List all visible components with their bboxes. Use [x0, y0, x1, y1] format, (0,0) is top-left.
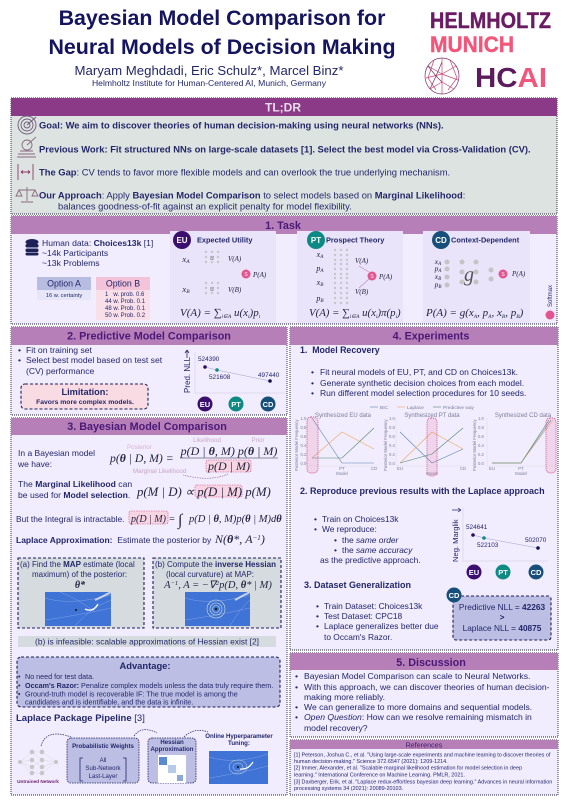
panel: step b: (local curvature) at MAP: — [166, 570, 254, 579]
callout: advantage: • — [18, 672, 21, 681]
bullets: recovery — [311, 367, 526, 398]
bullets: reproduce: Train on Choices13k — [322, 514, 399, 524]
heading: bayesian: 3. Bayesian Model Comparison — [67, 421, 227, 433]
box: probabilistic weights: Last-Layer — [89, 773, 117, 780]
panel: references — [290, 740, 558, 795]
authors: Maryam Meghdadi, Eric Schulz*, Marcel Binz* — [75, 63, 343, 78]
chart: negative marginal likelihood: 522103 — [477, 542, 499, 549]
chart: negative marginal likelihood: 502070 — [525, 537, 547, 544]
callout: limitation — [21, 384, 148, 409]
Bayes formula: p(θ | D, M) = — [109, 452, 174, 465]
chart: negative marginal likelihood — [451, 507, 548, 562]
heading: experiments: 4. Experiments — [393, 330, 469, 342]
logo: Helmholtz Munich: HELMHOLTZ — [430, 8, 551, 33]
callout: NLL comparison: > — [500, 612, 505, 622]
model card: expected utility: i — [259, 314, 261, 320]
chart: predictive NLL — [183, 350, 285, 393]
subheading: model recovery: 1. Model Recovery — [300, 345, 380, 355]
model card: context-dependent: , x — [491, 307, 502, 319]
bullets: recovery: • — [311, 388, 314, 398]
model card: context-dependent: CD — [435, 236, 447, 245]
reference list: [3] Daxberger, Erik, et al. "Laplace redux-effortless bayesian deep learning." Advances in neural information — [294, 780, 552, 786]
chart: synthesized PT data: 0.8 — [389, 425, 395, 430]
bullets: generalization: • — [316, 621, 319, 631]
Laplace approximation: N(θ*, A — [215, 532, 253, 546]
icon: gap arrows — [18, 164, 33, 180]
arrow: to probabilistic weights — [41, 734, 71, 746]
subheading: reproduce: 2. Reproduce previous results with the Laplace approach — [300, 486, 545, 496]
box: probabilistic weights: All — [100, 757, 106, 764]
icon: database — [26, 239, 38, 256]
bullets: discussion: Open Question: How can we resolve remaining mismatch in — [304, 712, 532, 722]
reference list: learning." International Conference on Machine Learning. PMLR, 2021. — [294, 772, 465, 778]
marginal likelihood formula: p(M | D) ∝ p(D | M) p(M) — [136, 485, 271, 499]
chart: synthesized EU data: PT — [339, 466, 345, 471]
panel: 2. Predictive Model Comparison — [11, 327, 287, 415]
model badges: EU — [469, 568, 479, 577]
chart legend — [370, 405, 475, 411]
marginal likelihood formula: be used for Model selection. — [18, 490, 130, 500]
chart: negative marginal likelihood: 524641 — [466, 524, 488, 531]
chart: synthesized EU data: 0.6 — [300, 434, 307, 439]
bullets: reproduce: as the predictive approach. — [320, 555, 421, 565]
model card: context-dependent: p — [435, 280, 438, 289]
chart: synthesized EU data: 0.4 — [300, 443, 307, 448]
Laplace approximation — [16, 532, 265, 546]
dataset text — [42, 238, 153, 268]
bullets: discussion: Bayesian Model Comparison can scale to Neural Networks. — [304, 671, 530, 681]
model badges — [198, 396, 276, 412]
diagram: untrained network: Untrained Network — [17, 779, 59, 784]
model card: expected utility: u — [210, 253, 214, 262]
integral formula: p(D | M) = — [130, 514, 175, 525]
text: online tuning — [205, 733, 273, 747]
Laplace approximation: −1 — [253, 534, 261, 542]
callout: advantage: candidates and is identifiable, and the data is infinite. — [25, 698, 193, 706]
bullets: • — [18, 345, 21, 355]
panel: step b: p(D, — [218, 580, 241, 591]
chart: predictive NLL: 521608 — [209, 374, 231, 381]
model card: expected utility: i∈A — [222, 314, 232, 320]
Bayes formula: p(D | M) — [207, 459, 250, 473]
plot: loss landscape a — [45, 592, 111, 626]
model card: context-dependent: A — [487, 314, 492, 320]
chart: synthesized CD data: 0.0 — [478, 461, 484, 466]
plot: tuning landscape — [209, 751, 268, 784]
Bayes formula: Likelihood — [193, 437, 221, 444]
bullets: reproduce — [314, 514, 421, 565]
model card: expected utility: A — [185, 259, 190, 265]
callout: advantage: • — [18, 690, 21, 698]
bullets: • — [18, 355, 21, 365]
reference list: [1] Peterson, Joshua C., et al. "Using large-scale experiments and machine learning to discover theories of — [294, 752, 551, 758]
option B table: 1 w. prob. 0.6 — [105, 292, 145, 298]
chart: synthesized EU data: Model — [336, 471, 348, 476]
panel: 3. Bayesian Model Comparison — [11, 418, 287, 795]
heading: TL;DR: TL;DR — [265, 100, 301, 114]
softmax legend — [546, 285, 554, 320]
diagram: untrained network — [17, 750, 59, 784]
chart: synthesized PT data — [383, 413, 466, 476]
model card: prospect theory: A — [319, 254, 324, 260]
chart: synthesized EU data: 0.2 — [300, 452, 307, 457]
note: hessian infeasible: (b) is infeasible: scalable approximations of Hessian exist [2] — [35, 636, 259, 646]
model card: context-dependent: B — [438, 277, 441, 282]
model card: context-dependent: P(A) = g(x — [426, 307, 474, 319]
heading: Laplace pipeline: Laplace Package Pipeline [3] — [16, 713, 145, 724]
chart: synthesized CD data: Synthesized CD data — [495, 413, 552, 419]
logo: brain — [425, 58, 459, 94]
bullets: Select best model based on test set — [26, 355, 163, 365]
model badges: PT — [231, 400, 241, 409]
panel: step b: θ* | M) — [241, 580, 272, 591]
Bayes formula: Prior — [251, 437, 265, 444]
chart legend: BIC — [380, 405, 389, 411]
bullets: reproduce: • — [314, 524, 317, 534]
bullets: recovery: Generate synthetic decision choices from each model. — [320, 378, 524, 388]
bullets: Fit on training set — [26, 345, 93, 355]
bullets: recovery: Run different model selection procedures for 10 seeds. — [320, 388, 526, 398]
model card: expected utility: EU — [176, 236, 188, 245]
chart: synthesized CD data: EU — [489, 466, 495, 471]
bullets: reproduce: • — [314, 514, 317, 524]
callout: advantage: Ground-truth model is recoverable IF: The true model is among the — [25, 690, 238, 698]
integral formula: ∫ — [177, 512, 184, 530]
chart: synthesized EU data: 0.8 — [300, 425, 307, 430]
bullets: generalization: to Occam's Razor. — [324, 632, 392, 642]
model card: context-dependent — [423, 231, 530, 323]
model card: context-dependent: ) — [519, 307, 524, 319]
chart: synthesized EU data: 1.0 — [300, 416, 307, 421]
panel: step a: (a) Find the MAP estimate (local — [20, 560, 135, 569]
bullets: recovery: • — [311, 378, 314, 388]
model card: expected utility: x — [182, 254, 186, 264]
panel: step a: maximum) of the posterior: — [32, 570, 127, 579]
chart: synthesized EU data: Synthesized EU data — [315, 413, 372, 419]
panel: 5. Discussion — [290, 653, 558, 737]
callout: advantage: Occam's Razor: Penalize complex models unless the data truly require them. — [25, 681, 273, 690]
model card: prospect theory: B — [320, 298, 324, 304]
Bayes formula — [17, 437, 278, 478]
chart: synthesized PT data: Posterior Model Frequency — [383, 419, 388, 471]
Laplace approximation: ) — [260, 532, 265, 546]
marginal likelihood formula: The Marginal Likelihood can — [18, 479, 132, 489]
model card: prospect theory: i — [376, 314, 378, 320]
box: probabilistic weights: Probabilistic Weights — [72, 743, 135, 750]
option B table — [96, 277, 150, 320]
model card: context-dependent: B — [438, 285, 441, 290]
bullets: discussion: • — [295, 702, 298, 712]
panel: step b: −1 — [171, 580, 178, 587]
option B table: Option B — [106, 278, 140, 288]
panel: TL;DR — [11, 98, 557, 214]
panel: step b: (b) Compute the inverse Hessian — [155, 560, 276, 569]
bullets: discussion: We can generalize to more domains and sequential models. — [304, 702, 532, 712]
model card: expected utility: Expected Utility — [197, 236, 253, 244]
model card: prospect theory: A — [319, 268, 324, 274]
bullets — [18, 345, 163, 376]
bullets: generalization: • — [316, 601, 319, 611]
reference list: [2] Immer, Alexander, et al. "Scalable marginal likelihood estimation for model selection in deep — [294, 766, 522, 772]
model card: context-dependent: Context-Dependent — [451, 236, 520, 244]
box: hessian approximation: Approximation — [150, 746, 194, 753]
chart: synthesized PT data: 0.4 — [389, 443, 395, 448]
bullets: recovery: Fit neural models of EU, PT, and CD on Choices13k. — [320, 367, 518, 377]
logo: Helmholtz Munich: MUNICH — [430, 32, 514, 57]
icon: scales — [16, 187, 38, 202]
callout: NLL comparison: Predictive NLL = 42263 — [459, 602, 545, 612]
model card: context-dependent: g — [464, 264, 474, 286]
callout: NLL comparison: Laplace NLL = 40875 — [463, 623, 542, 633]
reference list: processing systems 34 (2021): 20089-20103. — [294, 786, 404, 792]
model card: expected utility — [170, 231, 276, 323]
chart: synthesized EU data: Posterior Model Frequency — [294, 419, 299, 471]
model card: prospect theory: V(A) = ∑ — [309, 307, 350, 319]
model card: context-dependent: P(A) — [511, 270, 526, 278]
bullets: discussion: making more reliably. — [304, 692, 385, 702]
chart: synthesized CD data: 0.6 — [478, 434, 484, 439]
chart: synthesized CD data: 0.2 — [478, 452, 484, 457]
gap text: The Gap: CV tends to favor more flexible models and can overlook the true underlying mechanism. — [39, 166, 450, 178]
reference list: human decision-making." Science 372.6547 (2021): 1209-1214. — [294, 759, 448, 765]
model card: prospect theory: PT — [311, 236, 321, 245]
chart: synthesized EU data — [294, 413, 378, 476]
model card: context-dependent: S — [501, 272, 505, 278]
goal text: Goal: We aim to discover theories of human decision-making using neural networks (NNs). — [39, 120, 444, 130]
bullets: recovery: • — [311, 367, 314, 377]
integral formula: But the Integral is intractable. — [16, 514, 124, 524]
callout: NLL comparison — [446, 588, 551, 640]
approach text: Our Approach: Apply Bayesian Model Comparison to select models based on Marginal Likelihood: — [39, 190, 465, 200]
chart: synthesized PT data: 0.6 — [389, 434, 395, 439]
model card: expected utility: S — [244, 272, 248, 278]
model card: expected utility: )p — [249, 307, 259, 319]
Bayes formula: we have: — [17, 459, 52, 469]
bullets: generalization: Train Dataset: Choices13k — [324, 601, 423, 611]
chart: synthesized PT data: 1.0 — [389, 416, 395, 421]
model card: prospect theory — [297, 231, 403, 323]
option B table: 50 w. Prob. 0.2 — [105, 313, 146, 319]
option A table: 16 w. certainty — [46, 293, 82, 299]
integral formula: p(D | θ, M)p(θ | M)dθ — [188, 514, 282, 525]
chart: synthesized PT data: 0.2 — [389, 452, 395, 457]
bullets: reproduce: the same order — [342, 535, 400, 545]
bullets: discussion: • — [295, 712, 298, 722]
chart legend: Predictive way — [443, 405, 475, 411]
model card: context-dependent: A — [473, 314, 478, 320]
chart: synthesized PT data: EU — [397, 466, 403, 471]
Laplace approximation: Laplace Approximation: Estimate the posterior by — [16, 535, 212, 545]
panel: TL;DR: balances goodness-of-fit against an explicit penalty for model flexibility. — [58, 200, 352, 212]
model card: prospect theory: p — [316, 264, 320, 273]
previous work text: Previous Work: Fit structured NNs on large-scale datasets [1]. Select the best model via Cross-Validation (CV). — [39, 144, 531, 154]
model card: context-dependent: , p — [477, 307, 489, 319]
model card: prospect theory: P(A) — [378, 273, 393, 281]
text: online tuning: Tuning: — [228, 740, 250, 747]
model card: expected utility: x — [182, 284, 186, 294]
model card: expected utility: V(A) — [228, 255, 242, 263]
model card: context-dependent: A — [437, 269, 442, 274]
box: probabilistic weights: Sub-Network — [85, 765, 122, 772]
model card: expected utility: u — [210, 284, 214, 293]
arrow: to hessian — [134, 730, 157, 736]
model card: context-dependent: B — [516, 314, 520, 320]
bullets: generalization — [316, 601, 439, 642]
bullets: discussion: With this approach, we can discover theories of human decision- — [304, 682, 550, 692]
chart: synthesized CD data: Model — [515, 471, 527, 476]
chart: synthesized EU data: 0.0 — [300, 461, 307, 466]
callout: advantage — [17, 657, 280, 707]
Bayes formula: p(D | θ, M) p(θ | M) — [180, 444, 277, 458]
integral formula — [16, 511, 282, 530]
logo: HCAI: HCAI — [475, 62, 547, 93]
bullets: reproduce: the same accuracy — [342, 545, 413, 555]
chart: synthesized EU data: CD — [371, 466, 377, 471]
model card: prospect theory: V(A) — [355, 257, 369, 265]
bullets: generalization: Test Dataset: CPC18 — [324, 611, 403, 621]
callout: advantage: Advantage: — [119, 660, 171, 671]
model card: expected utility: P(A) — [252, 271, 267, 279]
model card: expected utility: V(B) — [228, 286, 242, 294]
panel: step a: θ* — [75, 580, 86, 591]
chart: synthesized CD data: Posterior Model Frequency — [472, 419, 477, 471]
model card: prospect theory: Prospect Theory — [326, 236, 385, 244]
plot: loss landscape b — [185, 592, 250, 626]
bullets: reproduce: • — [334, 535, 337, 545]
title: Neural Models of Decision Making — [48, 35, 396, 59]
panel: 1. Task — [11, 216, 557, 324]
dataset text: Human data: Choices13k [1] — [42, 238, 153, 248]
chart: synthesized PT data: 0.0 — [389, 461, 395, 466]
model card: context-dependent: A — [437, 262, 442, 267]
chart: synthesized CD data: 0.4 — [478, 443, 484, 448]
model badges — [466, 564, 544, 580]
model card: prospect theory: B — [320, 282, 324, 288]
heading: predictive: 2. Predictive Model Comparison — [67, 330, 231, 342]
chart: predictive NLL: Pred. NLL — [183, 356, 192, 393]
heading: task: 1. Task — [265, 220, 302, 232]
bullets: discussion — [295, 671, 550, 733]
chart: synthesized PT data: Synthesized PT data — [404, 413, 460, 419]
box: hessian approximation: Hessian — [160, 739, 184, 746]
bullets: reproduce: • — [334, 545, 337, 555]
model card: expected utility: B — [186, 289, 190, 295]
panel: step b — [153, 558, 281, 628]
marginal likelihood formula — [18, 479, 271, 500]
chart: synthesized PT data: Model — [426, 471, 438, 476]
model card: context-dependent: x — [435, 257, 438, 266]
title — [48, 6, 396, 59]
model card: prospect theory: )π(p — [376, 307, 396, 319]
panel: step a — [18, 558, 144, 628]
model card: expected utility: u(x — [231, 307, 248, 319]
text: online tuning: Online Hyperparameter — [205, 733, 273, 740]
bullets: reproduce: We reproduce: — [322, 524, 377, 534]
model badges: EU — [200, 400, 210, 409]
model card: context-dependent: B — [502, 314, 506, 320]
chart: synthesized PT data: CD — [460, 466, 466, 471]
bullets: (CV) performance — [26, 366, 95, 376]
model card: expected utility: V(A) = ∑ — [180, 307, 222, 319]
model card: prospect theory: V(B) — [355, 288, 369, 296]
model card: prospect theory: S — [370, 274, 374, 280]
heading: references: References — [406, 740, 443, 750]
Bayes formula: Posterior — [127, 444, 152, 451]
model card: prospect theory: x — [317, 278, 320, 287]
bullets: discussion: • — [295, 671, 298, 681]
model card: context-dependent: , p — [505, 307, 517, 319]
chart: synthesized CD data: PT — [518, 466, 524, 471]
panel: step b: , A = −∇ — [178, 580, 218, 591]
callout: limitation: Limitation: — [62, 387, 108, 397]
panel: 4. Experiments — [290, 327, 558, 650]
chart: negative marginal likelihood: Neg. Marglik — [451, 519, 460, 562]
chart: predictive NLL: 524390 — [198, 356, 220, 363]
callout: NLL comparison: CD — [449, 591, 460, 600]
dataset text: ~13k Problems — [42, 258, 100, 268]
callout: limitation: Favors more complex models. — [36, 399, 134, 406]
model card: context-dependent: x — [435, 272, 438, 281]
model card: prospect theory: x — [317, 250, 320, 259]
model card: prospect theory: p — [316, 294, 320, 303]
model card: prospect theory: i∈A — [350, 314, 360, 320]
chart: predictive NLL: 497440 — [258, 372, 280, 379]
chart legend: Laplace — [407, 405, 424, 411]
bullets: generalization: Laplace generalizes better due — [324, 621, 439, 631]
model card: prospect theory: i — [395, 314, 397, 320]
option B table: 44 w. Prob. 0.1 — [105, 299, 146, 305]
model card: prospect theory: ) — [396, 307, 401, 319]
option B table: 48 w. Prob. 0.1 — [105, 306, 146, 312]
heading: discussion: 5. Discussion — [396, 657, 466, 669]
bullets: discussion: • — [295, 682, 298, 692]
dataset text: ~14k Participants — [42, 248, 108, 258]
model card: expected utility: i — [248, 314, 250, 320]
model badges: PT — [498, 568, 508, 577]
box: hessian approximation — [148, 738, 196, 783]
model card: context-dependent: p — [435, 264, 438, 273]
title: Bayesian Model Comparison for — [59, 6, 385, 30]
model card: prospect theory: u(x — [359, 307, 376, 319]
Bayes formula: In a Bayesian model — [18, 448, 95, 458]
panel: step b: A — [164, 580, 171, 591]
icon: target — [18, 116, 36, 134]
panel: step b: 2 — [216, 580, 220, 587]
callout: advantage: • — [18, 681, 21, 690]
icon: books — [17, 137, 36, 157]
chart: synthesized CD data: 1.0 — [478, 416, 484, 421]
reference list — [294, 752, 552, 792]
subheading: dataset generalization: 3. Dataset Generalization — [304, 580, 411, 590]
arrow: to hyperparameter tuning — [184, 730, 208, 737]
model badges: CD — [531, 568, 542, 577]
affiliation: Helmholtz Institute for Human-Centered AI, Munich, Germany — [92, 78, 327, 88]
chart: synthesized CD data — [472, 413, 556, 476]
bullets: generalization: • — [316, 611, 319, 621]
bullets: discussion: model recovery? — [304, 723, 368, 733]
callout: advantage: No need for test data. — [25, 672, 94, 681]
model badges: CD — [263, 400, 274, 409]
option A table — [37, 277, 91, 300]
chart: synthesized CD data: 0.8 — [478, 425, 484, 430]
box: probabilistic weights — [67, 738, 139, 783]
logo: Helmholtz Munich — [430, 8, 551, 57]
Bayes formula: Marginal Likelihood — [133, 468, 187, 475]
softmax legend: Softmax — [548, 285, 554, 307]
option A table: Option A — [47, 278, 81, 288]
